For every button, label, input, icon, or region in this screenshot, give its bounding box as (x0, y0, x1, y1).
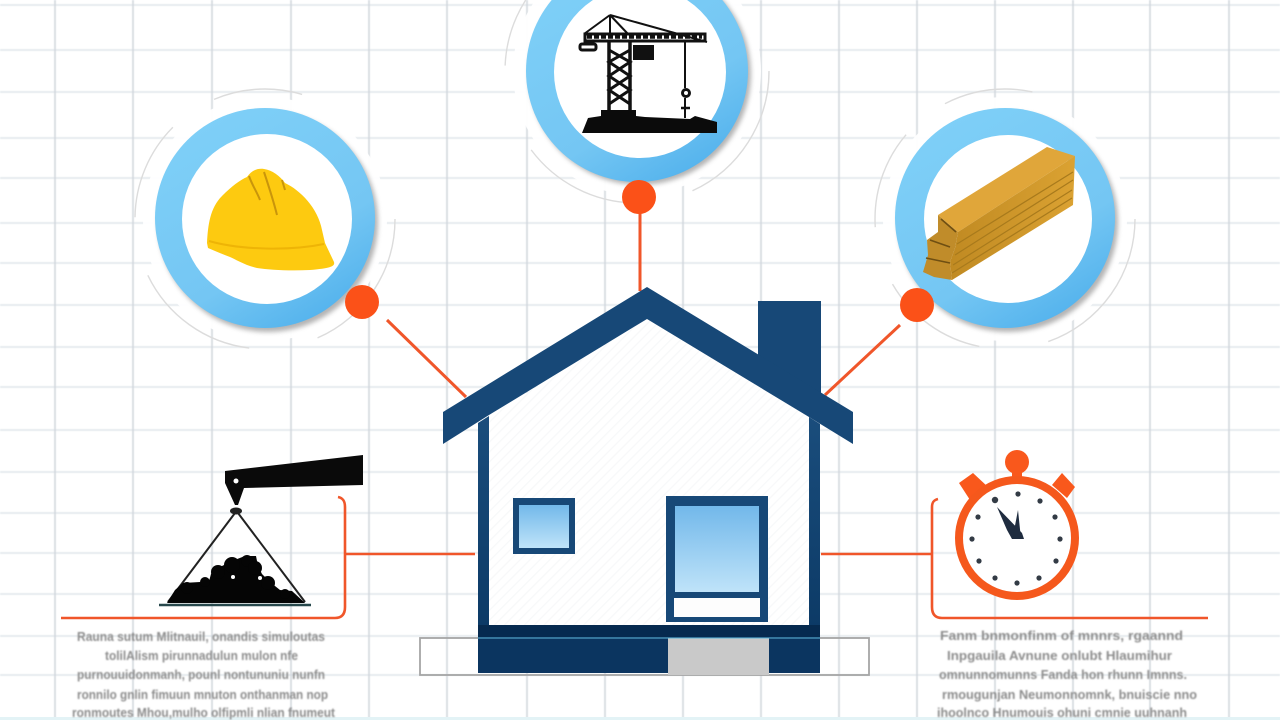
house illustration (420, 287, 869, 675)
bottom edge strip (0, 717, 1280, 720)
connector: left circle to house (387, 320, 466, 397)
text block: right caption: rmougunjan Neumonnomnk, bnuiscie nno (942, 687, 1197, 702)
house roof (443, 287, 853, 444)
text block: left caption: tolilAlism pirunnadulun mulon nfe (105, 648, 298, 663)
connector: right circle to house (825, 325, 900, 395)
marker: top orange dot (622, 180, 656, 214)
house chimney (758, 301, 821, 395)
text block: right caption: ihoolnco Hnumouis ohuni cmnie uuhnanh (937, 705, 1187, 720)
house wall face (489, 319, 809, 625)
text block: right caption (937, 628, 1197, 720)
house foundation outline (420, 638, 869, 675)
text block: right caption: Fanm bnmonfinm of mnnrs, rgaannd (940, 628, 1183, 643)
house foundation (478, 625, 820, 675)
panel: hard hat circle (135, 89, 395, 349)
text block: right caption: Inpgauila Avnune onlubt Hlaumihur (947, 648, 1172, 663)
house right wall (809, 417, 820, 630)
text block: left caption: Rauna sutum Mlitnauil, onandis simuloutas (77, 629, 325, 644)
icon: stacked lumber (923, 147, 1075, 280)
connector: top circle to house (638, 212, 642, 291)
icon: stopwatch (959, 450, 1075, 596)
left bracket connector (61, 497, 475, 618)
marker: left orange dot (345, 285, 379, 319)
text block: left caption: ronmoutes Mhou,mulho olfipmli nlian fnumeut (72, 705, 336, 720)
house window (513, 498, 575, 554)
panel: crane circle (505, 0, 769, 203)
right bracket connector (821, 499, 1208, 618)
icon: yellow hard hat (207, 169, 334, 270)
panel: lumber circle (875, 89, 1135, 349)
marker: right orange dot (900, 288, 934, 322)
house left wall (478, 416, 489, 630)
text block: right caption: omnunnomunns Fanda hon rhunn Imnns. (939, 667, 1187, 682)
icon: crane hook lifting debris (159, 455, 363, 605)
icon: tower crane (580, 15, 717, 133)
house door (666, 496, 768, 622)
text block: left caption: ronnilo gnlin fimuun mnuton onthanman nop (77, 687, 328, 702)
text block: left caption: purnouuidonmanh, pounl nontununiu nunfn (77, 667, 325, 682)
text block: left caption (72, 629, 336, 720)
